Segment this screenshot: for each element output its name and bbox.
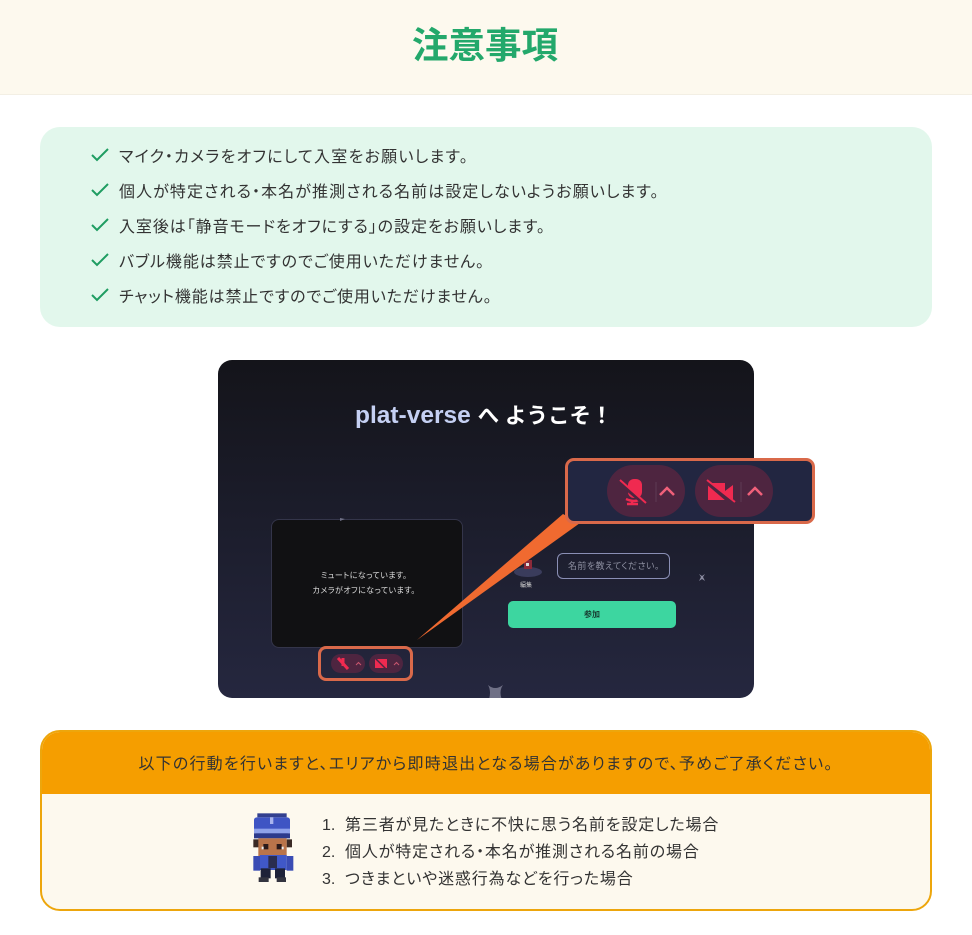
join button: 参加	[584, 610, 600, 619]
list item 1: 1.	[322, 817, 335, 834]
list item 3: つきまといや迷惑行為などを行った場合	[345, 871, 634, 888]
list item 2: 個人が特定される・本名が推測される名前の場合	[345, 844, 700, 861]
check item 4: バブル機能は禁止ですのでご使用いただけません。	[119, 254, 485, 270]
check item 2: 個人が特定される・本名が推測される名前は設定しないようお願いします。	[119, 184, 660, 200]
name input: 名前を教えてください。	[568, 561, 660, 571]
panel: checklist	[40, 127, 932, 327]
preview message	[312, 571, 416, 595]
check item 3: 入室後は「静音モードをオフにする」の設定をお願いします。	[119, 218, 546, 236]
preview message: カメラがオフになっています。	[312, 586, 416, 595]
welcome heading: plat-verse へ ようこそ！	[355, 402, 613, 429]
list item 1: 第三者が見たときに不快に思う名前を設定した場合	[345, 817, 719, 834]
name input	[557, 553, 670, 579]
avatar	[514, 560, 542, 577]
numbered list	[322, 816, 719, 888]
callout pointer	[417, 514, 578, 640]
small highlighted controls	[318, 646, 413, 681]
panel: warning	[40, 730, 932, 911]
check item 1: マイク・カメラをオフにして入室をお願いします。	[119, 148, 469, 166]
header band	[0, 0, 972, 95]
decorative stars	[340, 518, 705, 698]
list item 2: 2.	[322, 844, 335, 861]
preview message: ミュートになっています。	[321, 571, 407, 580]
icon: pixel guard	[253, 813, 294, 882]
list item 3: 3.	[322, 871, 335, 888]
warning heading: 以下の行動を行いますと、エリアから即時退出となる場合がありますので、予めご了承ください。	[138, 756, 834, 773]
check item 5: チャット機能は禁止ですのでご使用いただけません。	[119, 288, 492, 306]
screenshot: entry screen	[218, 360, 754, 698]
join button	[508, 601, 676, 628]
avatar edit label: 編集	[520, 583, 532, 589]
callout: enlarged controls	[565, 458, 815, 524]
icon: muted microphone	[607, 465, 685, 517]
video preview	[271, 519, 463, 648]
warning heading	[42, 732, 930, 794]
icon: camera off	[695, 465, 773, 517]
title: 注意事項	[412, 25, 558, 66]
